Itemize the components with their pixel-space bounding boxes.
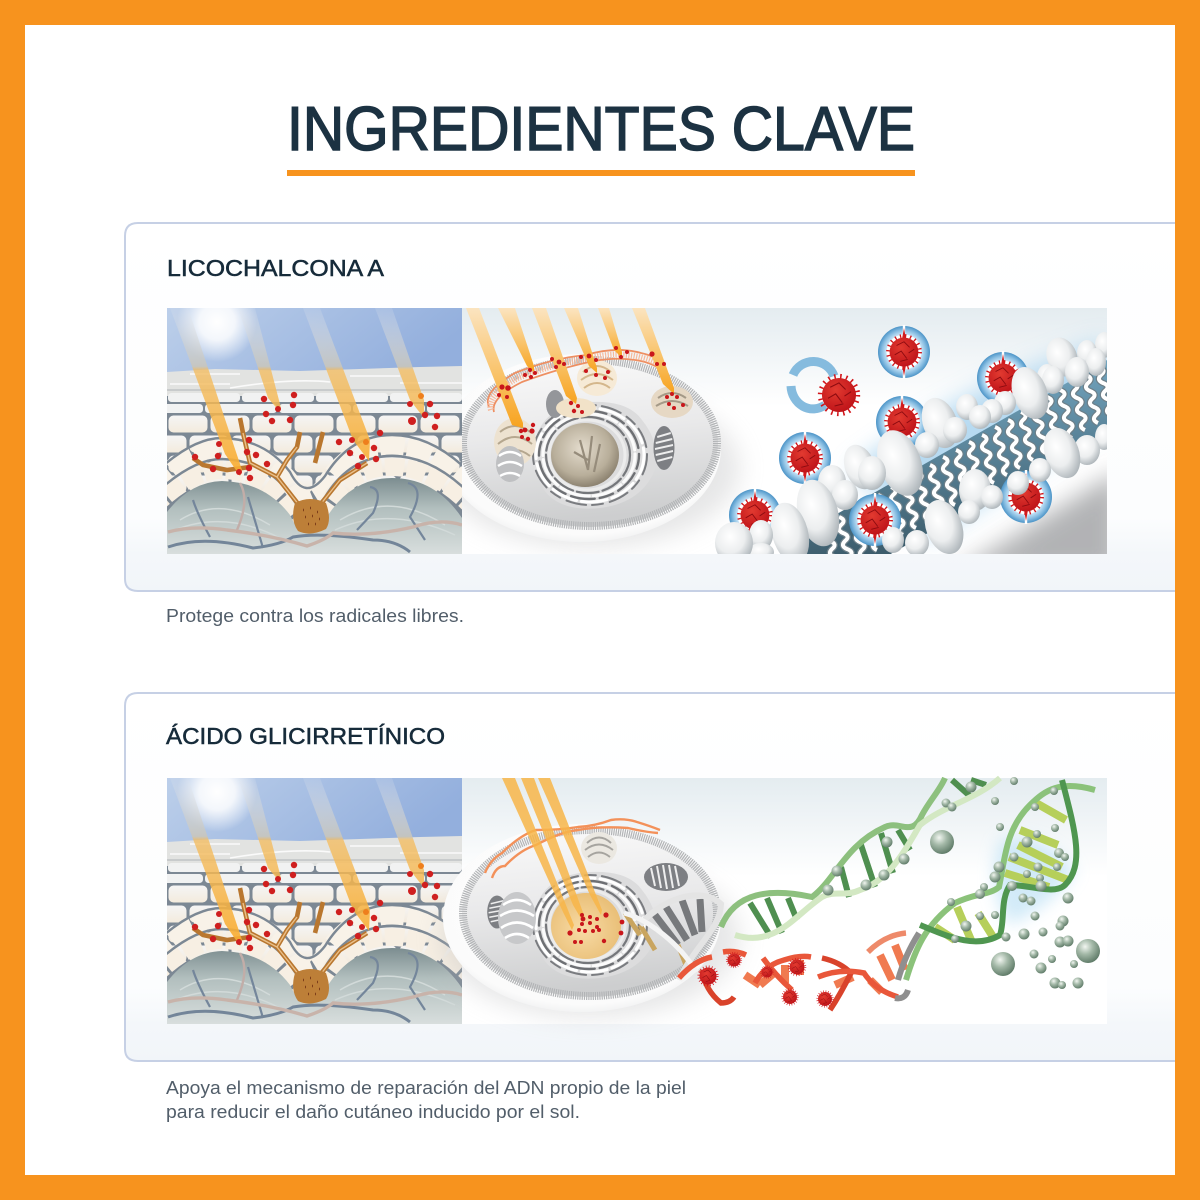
DNA helix left green — [721, 778, 1000, 938]
cell with organelles — [440, 350, 740, 548]
panel card 1 — [125, 223, 1185, 591]
antioxidants within membrane — [849, 470, 1052, 547]
UV rays into nucleus — [502, 778, 602, 930]
caption 2: para reducir el daño cutáneo inducido por el sol. — [166, 1101, 580, 1122]
illustration: cell and lipid membrane — [462, 308, 1107, 554]
caption 1: Protege contra los radicales libres. — [166, 605, 464, 626]
DNA helix right green — [906, 780, 1095, 980]
lipid heads upper row — [715, 332, 1113, 568]
green spheres — [822, 777, 1100, 989]
red dots in nucleus — [567, 912, 624, 944]
image background 2 — [462, 778, 1107, 1024]
cell with nucleus — [440, 819, 740, 1018]
grey DNA helix section — [624, 895, 721, 980]
UV rays into cell — [466, 308, 674, 428]
title: INGREDIENTES CLAVE — [287, 95, 915, 164]
lipid heads lower row — [882, 423, 1113, 559]
lipid bilayer tails — [826, 367, 1107, 554]
lipid background glow and shadow — [807, 334, 1107, 554]
opened antioxidant ring and radical — [791, 361, 858, 414]
caption 2: Apoya el mecanismo de reparación del ADN propio de la piel — [166, 1077, 686, 1098]
antioxidants neutralizing radicals — [729, 325, 1029, 542]
heading: licochalcona A: LICOCHALCONA A — [167, 255, 384, 281]
panel card 2 — [125, 693, 1185, 1061]
heading: acido glicirretinico: ÁCIDO GLICIRRETÍNICO — [166, 723, 445, 749]
image background 1 — [462, 308, 1107, 554]
title underline — [287, 170, 915, 176]
panel: acido glicirretinico — [125, 693, 1185, 1122]
panel: licochalcona A — [125, 223, 1185, 626]
free radical dots in cell — [497, 346, 685, 441]
illustration: cell and DNA — [440, 777, 1107, 1024]
skin illustration 2 — [150, 752, 475, 1024]
skin illustration 1 — [150, 282, 475, 554]
red damaged DNA section — [679, 933, 919, 1010]
